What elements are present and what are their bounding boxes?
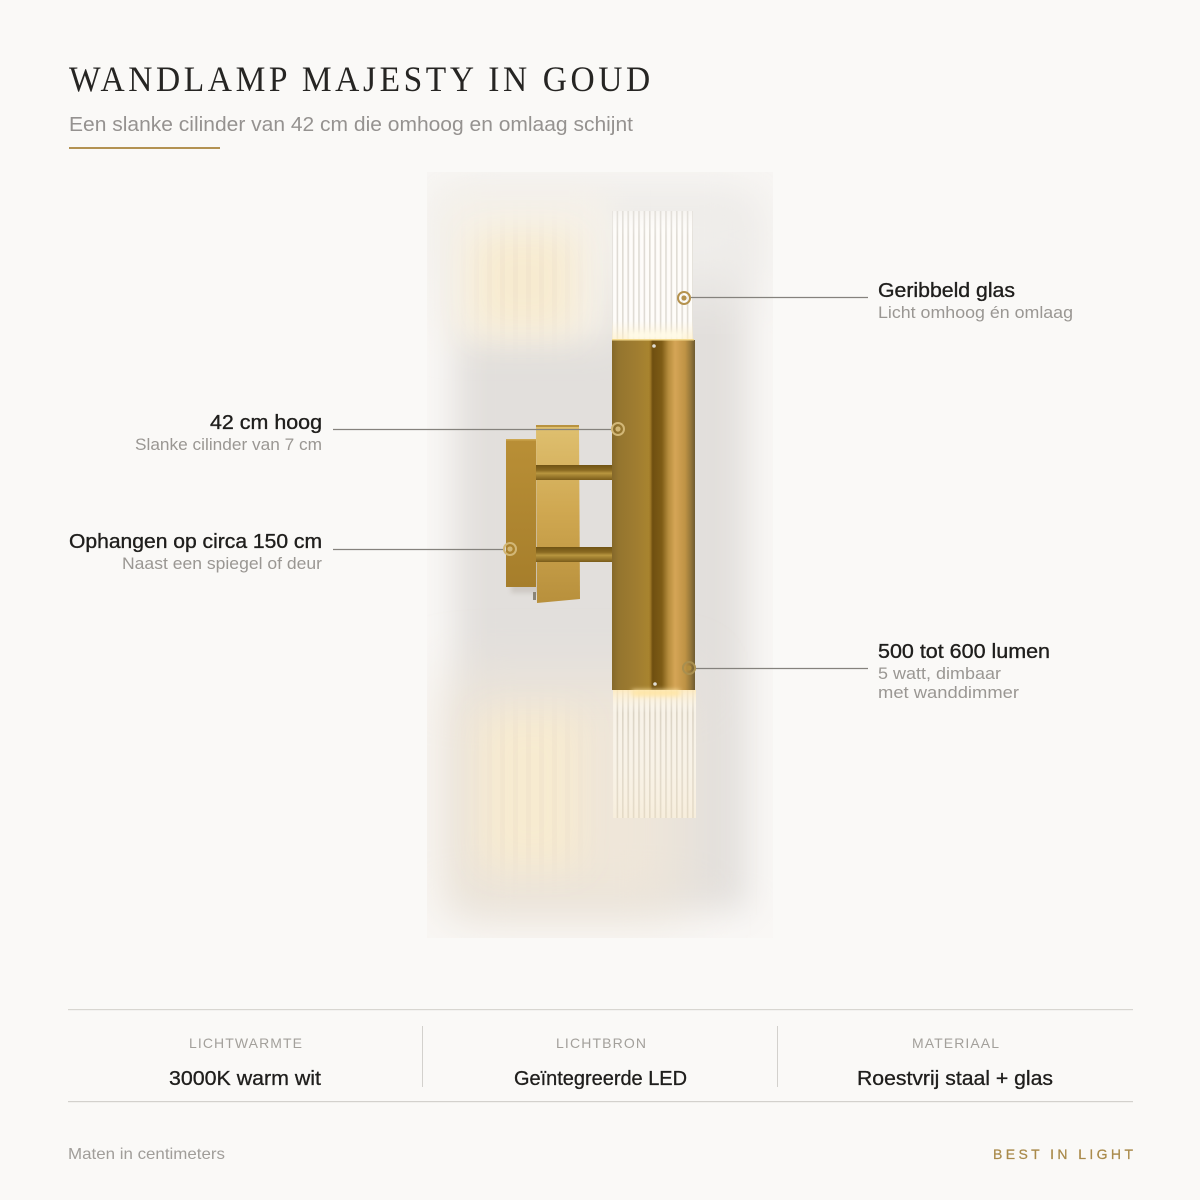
footer note: Maten in centimeters <box>68 1146 225 1163</box>
brand name: BEST IN LIGHT <box>993 1146 1133 1162</box>
callout: ribbed glass <box>678 280 1073 322</box>
callout: height <box>135 412 624 454</box>
spec: light source: LICHTBRON <box>556 1035 646 1051</box>
spec: light warmth: 3000K warm wit <box>169 1068 321 1090</box>
callout: ribbed glass: Licht omhoog én omlaag <box>878 303 1073 322</box>
spec: light source <box>514 1035 687 1090</box>
product photo: wall lamp <box>427 172 773 938</box>
callout: ribbed glass: Geribbeld glas <box>878 280 1015 302</box>
spec: material: Roestvrij staal + glas <box>857 1068 1053 1090</box>
lower light reflection <box>489 722 570 858</box>
spec: light source: Geïntegreerde LED <box>514 1068 687 1090</box>
upper ribbed glass <box>612 211 693 340</box>
gold cylinder <box>612 339 695 690</box>
specification band <box>68 1009 1133 1102</box>
callout: height: Slanke cilinder van 7 cm <box>135 435 322 454</box>
spec: light warmth <box>169 1035 321 1090</box>
callout: mounting height <box>69 531 516 573</box>
callout: height: 42 cm hoog <box>210 412 322 434</box>
callout: mounting height: Ophangen op circa 150 cm <box>69 531 322 553</box>
callout: lumen <box>683 641 1050 702</box>
callout: lumen: 500 tot 600 lumen <box>878 641 1050 663</box>
front mounting plate <box>533 425 580 603</box>
connecting rods <box>536 465 613 562</box>
callout: mounting height: Naast een spiegel of deur <box>122 554 322 573</box>
upper light reflection <box>461 221 585 338</box>
spec: material <box>857 1035 1053 1090</box>
callout: lumen: 5 watt, dimbaar <box>878 664 1001 683</box>
spec: material: MATERIAAL <box>912 1035 999 1051</box>
title: WANDLAMP MAJESTY IN GOUD <box>69 59 650 99</box>
spec: light warmth: LICHTWARMTE <box>189 1035 302 1051</box>
lower ribbed glass <box>613 690 696 818</box>
wall background <box>427 172 773 938</box>
gold title rule <box>69 147 220 149</box>
subtitle: Een slanke cilinder van 42 cm die omhoog en omlaag schijnt <box>69 114 633 136</box>
callout: lumen: met wanddimmer <box>878 683 1019 702</box>
back plate <box>506 439 541 593</box>
